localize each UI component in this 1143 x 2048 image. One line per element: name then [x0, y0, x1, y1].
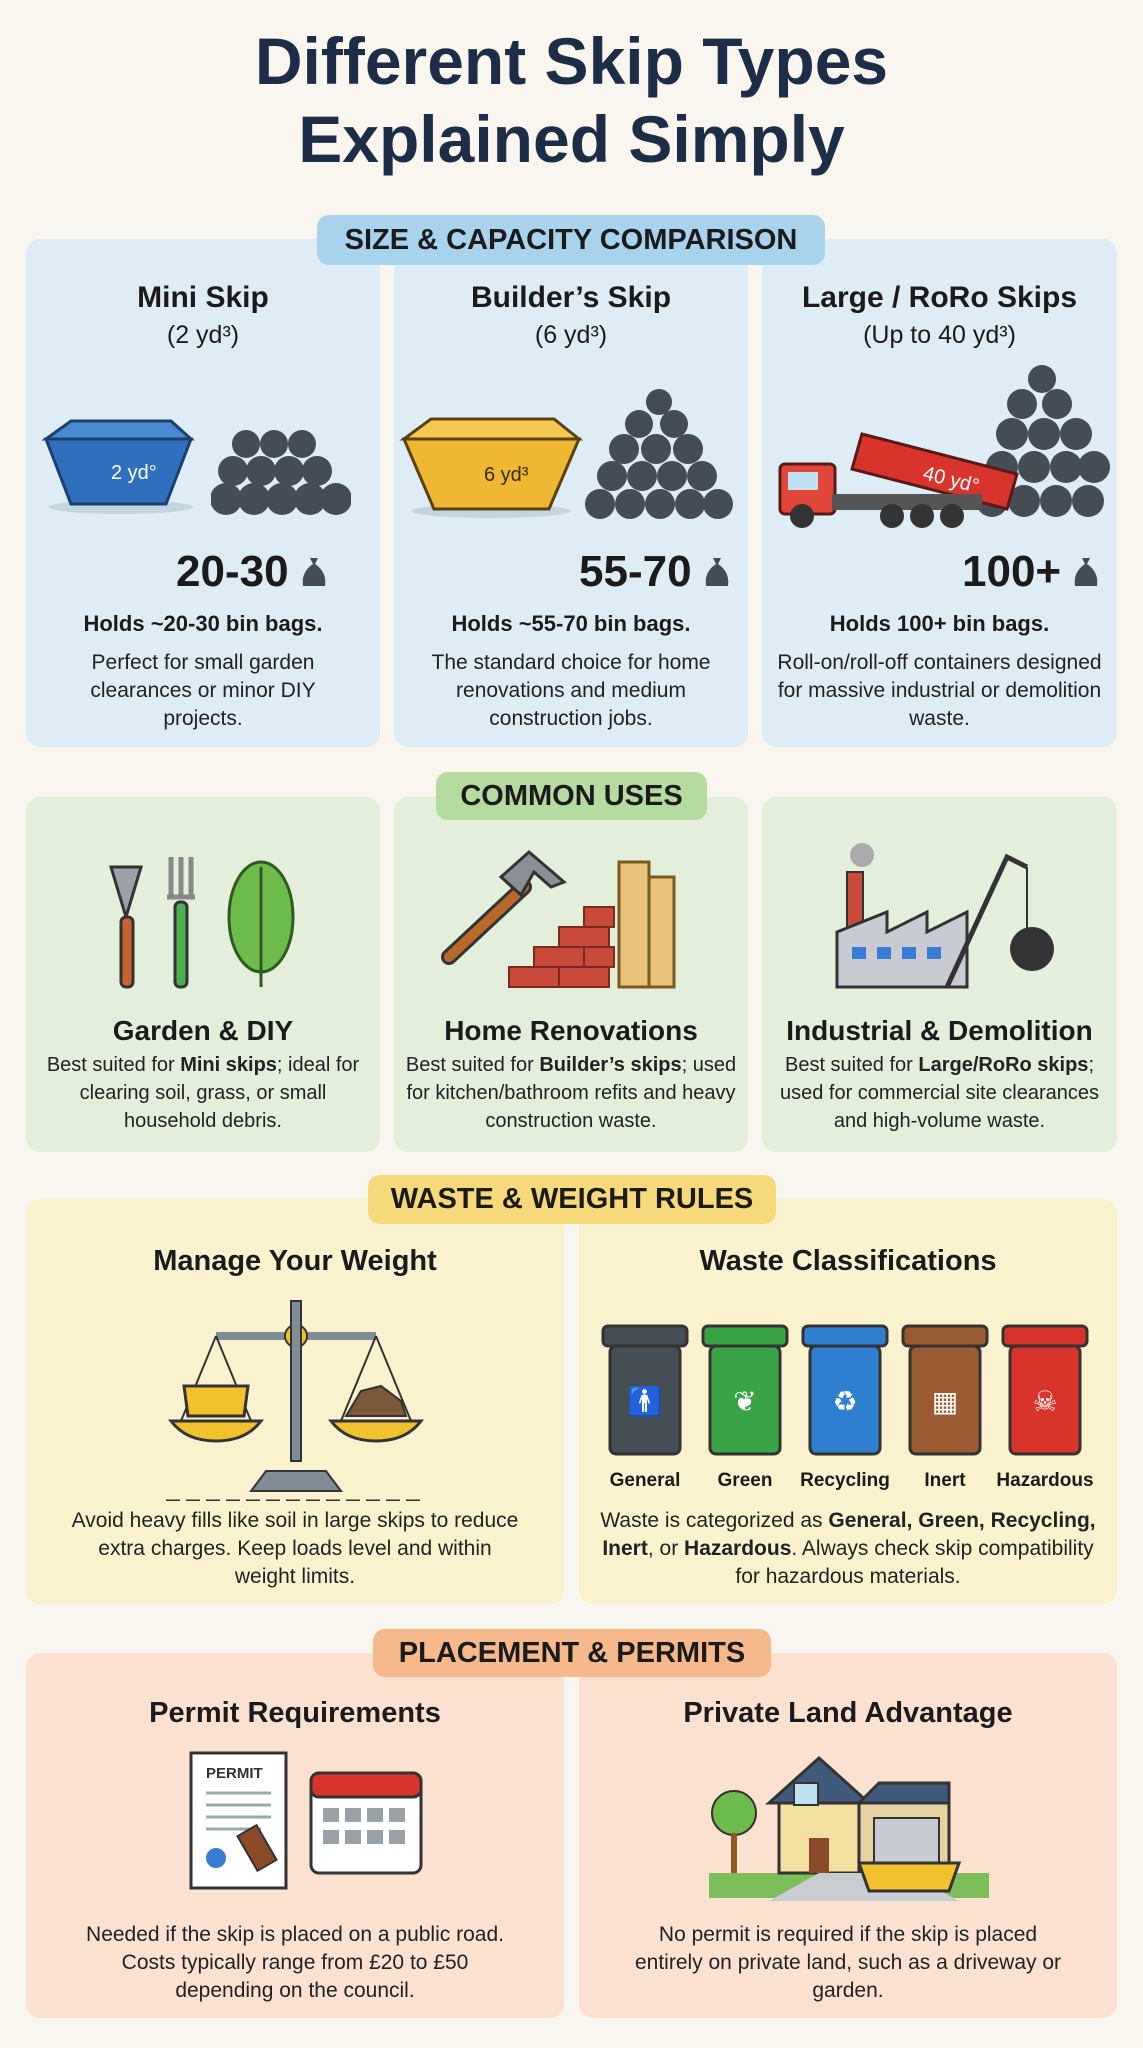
pill: placement & permits: PLACEMENT & PERMITS — [399, 1637, 745, 1669]
icon: blue skip — [42, 420, 195, 514]
panel: waste classifications: Waste Classifications — [699, 1245, 997, 1277]
panel: large roro — [762, 239, 1117, 747]
icon: bag pile — [211, 430, 351, 515]
icon: permit document and calendar — [190, 1752, 422, 1890]
panel: large roro: Holds 100+ bin bags. — [830, 611, 1049, 636]
pill: size & capacity — [317, 215, 825, 265]
icon: yellow skip: 6 yd³ — [484, 464, 529, 486]
panel: home renovations: Best suited for Builder’s skips; used for kitchen/bathroom refits and heavy construction waste. — [406, 1054, 736, 1132]
icon: garden tools — [109, 857, 294, 988]
panel: private land — [579, 1653, 1117, 2018]
panel: large roro: Roll-on/roll-off containers designed for massive industrial or demolition waste. — [777, 651, 1102, 730]
icon: bins: Green — [718, 1470, 772, 1491]
icon: bins: General — [610, 1470, 680, 1491]
panel: manage weight: Avoid heavy fills like soil in large skips to reduce extra charges. Keep loads level and within weight limits. — [72, 1509, 518, 1588]
panel: industrial: Industrial & Demolition — [786, 1015, 1093, 1046]
pill: common uses — [436, 772, 707, 820]
icon: balance scale — [166, 1300, 424, 1501]
icon: roro truck: 40 yd° — [921, 463, 981, 498]
panel: large roro: (Up to 40 yd³) — [863, 321, 1016, 349]
panel: builder's skip — [394, 239, 748, 747]
icon: blue skip: 2 yd° — [111, 462, 157, 484]
number: 100+: 100+ — [962, 547, 1061, 596]
icon: bins — [602, 1324, 1094, 1491]
panel: garden & diy: Best suited for Mini skips; ideal for clearing soil, grass, or small household debris. — [47, 1054, 359, 1132]
icon: bins: ▦ — [932, 1385, 958, 1418]
panel: mini skip: Perfect for small garden clearances or minor DIY projects. — [90, 651, 316, 730]
panel: permit requirements: Needed if the skip is placed on a public road. Costs typically range from £20 to £50 depending on the council. — [86, 1923, 504, 2002]
icon: bins: 🚹 — [628, 1385, 662, 1418]
panel: garden & diy: Garden & DIY — [113, 1015, 293, 1046]
icon: hammer and bricks — [441, 850, 676, 988]
pill: waste & weight: WASTE & WEIGHT RULES — [391, 1183, 753, 1215]
panel: private land: Private Land Advantage — [683, 1697, 1013, 1729]
icon: roro truck — [778, 432, 1019, 528]
panel: mini skip: Holds ~20-30 bin bags. — [83, 611, 322, 636]
panel: large roro: Large / RoRo Skips — [802, 281, 1077, 314]
panel: builder's skip: Holds ~55-70 bin bags. — [451, 611, 690, 636]
icon: bag pile — [585, 389, 733, 519]
panel: permit requirements: Permit Requirements — [149, 1697, 441, 1729]
panel: garden & diy — [26, 797, 380, 1152]
panel: mini skip: Mini Skip — [137, 281, 269, 314]
panel: mini skip: (2 yd³) — [167, 321, 239, 349]
panel: permit requirements — [26, 1653, 564, 2018]
pill: placement & permits — [373, 1629, 771, 1677]
icon: bins: Recycling — [800, 1470, 890, 1491]
icon: bins: ❦ — [733, 1385, 757, 1418]
number: 20-30: 20-30 — [176, 547, 289, 596]
icon: bins: ☠ — [1032, 1385, 1058, 1418]
panel: builder's skip: (6 yd³) — [535, 321, 607, 349]
panel: builder's skip: The standard choice for home renovations and medium construction jobs. — [432, 651, 710, 730]
icon: house with skip — [709, 1756, 989, 1901]
panel: industrial — [762, 797, 1117, 1152]
panel: builder's skip: Builder’s Skip — [471, 281, 671, 314]
panel: industrial: Best suited for Large/RoRo skips; used for commercial site clearances and high-volume waste. — [780, 1054, 1099, 1132]
panel: home renovations — [394, 797, 748, 1152]
panel: manage weight: Manage Your Weight — [153, 1245, 437, 1277]
panel: private land: No permit is required if the skip is placed entirely on private land, such as a driveway or garden. — [635, 1923, 1061, 2002]
icon: permit document and calendar: PERMIT — [206, 1765, 263, 1782]
icon: bins: Inert — [924, 1470, 966, 1491]
pill: waste & weight — [368, 1175, 776, 1224]
pill: common uses: COMMON USES — [460, 780, 683, 812]
icon: factory and wrecking ball — [836, 843, 1054, 988]
panel: home renovations: Home Renovations — [444, 1015, 698, 1046]
title: Explained Simply — [298, 102, 845, 176]
panel: manage weight — [26, 1199, 564, 1604]
panel: waste classifications — [579, 1199, 1117, 1604]
icon: bins: Hazardous — [996, 1470, 1094, 1491]
panel: mini skip — [26, 239, 380, 747]
title — [255, 24, 888, 176]
panel: waste classifications: Waste is categorized as General, Green, Recycling, Inert, or Hazardous. Always check skip compatibility for hazardous materials. — [600, 1509, 1096, 1588]
number: 55-70: 55-70 — [579, 547, 692, 596]
icon: bins: ♻ — [832, 1385, 858, 1418]
icon: yellow skip — [400, 418, 584, 518]
title: Different Skip Types — [255, 24, 888, 98]
pill: size & capacity: SIZE & CAPACITY COMPARISON — [345, 224, 797, 256]
icon: bag mound — [978, 365, 1110, 517]
